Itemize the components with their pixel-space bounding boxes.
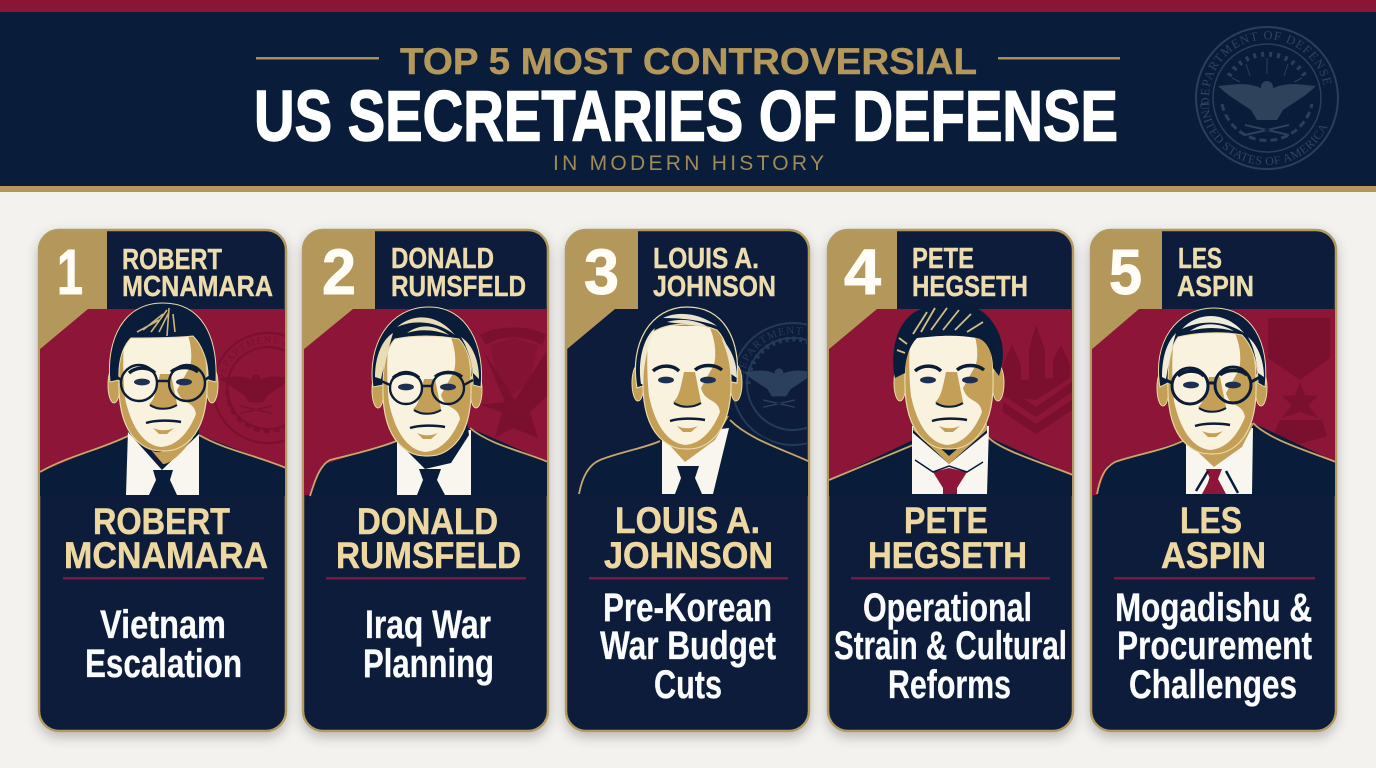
header name [122,244,273,303]
rank number 5: 5 [1109,236,1142,308]
controversy description: Iraq War [365,603,491,647]
header name: LOUIS A. [653,243,759,275]
controversy description [1115,586,1312,707]
controversy description: Operational [863,586,1032,630]
seal: Department of Defense: UNITED STATES OF AMERICA [1200,101,1328,165]
name: MCNAMARA [64,535,268,576]
controversy description: Mogadishu & [1115,586,1312,630]
subtitle: IN MODERN HISTORY [553,152,824,175]
medal watermark [1268,318,1330,444]
seal watermark: DEPARTMENT OF DEFENSE [738,326,808,378]
seal: Department of Defense [1195,26,1339,170]
rank number 1: 1 [57,236,83,308]
controversy description: Planning [363,642,494,686]
main title: US SECRETARIES OF DEFENSE [254,78,1118,156]
rank number 3: 3 [584,236,619,308]
name: DONALD [357,501,498,542]
portrait: Hegseth [829,303,1073,496]
panel: card 1 Robert McNamara [32,228,294,744]
panel: card 2 Donald Rumsfeld [303,230,548,731]
name: ROBERT [93,501,230,542]
seal: Department of Defense: DEPARTMENT OF DEFENSE [1200,31,1332,106]
panel: card 4 Pete Hegseth [828,230,1073,731]
controversy description: Escalation [85,642,242,686]
panel: card 5 Les Aspin [1091,230,1336,731]
chevron watermark [1003,325,1072,434]
card 1 artwork [40,231,285,496]
header name [912,243,1028,303]
name [64,501,268,576]
controversy description [600,586,776,707]
header name: JOHNSON [653,271,776,303]
card 5 artwork [1091,230,1336,496]
header name: MCNAMARA [122,271,273,303]
controversy description: Challenges [1129,663,1297,707]
controversy description [834,586,1067,707]
header name [653,243,776,303]
name: LOUIS A. [615,500,760,541]
controversy description: Reforms [888,663,1011,707]
rank number 2: 2 [322,236,356,308]
controversy description: War Budget [600,624,776,668]
name [336,501,521,576]
header name: DONALD [391,243,494,275]
controversy description: Cuts [654,663,722,707]
name: LES [1180,500,1242,541]
header name: LES [1178,243,1222,275]
controversy description [85,603,242,686]
name: JOHNSON [604,535,773,576]
card 3 artwork [567,231,808,496]
name [604,500,773,576]
eagle crest watermark [480,328,548,438]
controversy description [363,603,494,686]
seal watermark [214,332,285,444]
header name [391,243,526,303]
card 2 artwork [303,230,548,496]
header name: HEGSETH [912,271,1028,303]
header name [1177,243,1254,303]
panel: card 3 Louis A. Johnson [558,228,816,744]
portrait: Rumsfeld [310,307,548,496]
portrait: McNamara [40,303,286,496]
controversy description: Strain & Cultural [834,624,1067,668]
name [1161,500,1266,576]
card 4 artwork [828,230,1073,496]
header name: RUMSFELD [391,271,526,303]
portrait: Johnson [579,307,810,496]
header banner [0,0,1376,192]
portrait: Aspin [1097,308,1336,496]
seal watermark [733,322,808,446]
header name: ROBERT [122,244,222,276]
name [868,500,1027,576]
rank number 4: 4 [844,236,881,308]
controversy description: Vietnam [100,603,226,647]
name: HEGSETH [868,535,1027,576]
controversy description: Procurement [1117,624,1312,668]
name: ASPIN [1161,535,1266,576]
header name: PETE [912,243,974,275]
controversy description: Pre-Korean [603,586,772,630]
name: PETE [904,500,988,541]
header name: ASPIN [1177,271,1254,303]
eyebrow title: TOP 5 MOST CONTROVERSIAL [400,41,977,82]
name: RUMSFELD [336,535,521,576]
